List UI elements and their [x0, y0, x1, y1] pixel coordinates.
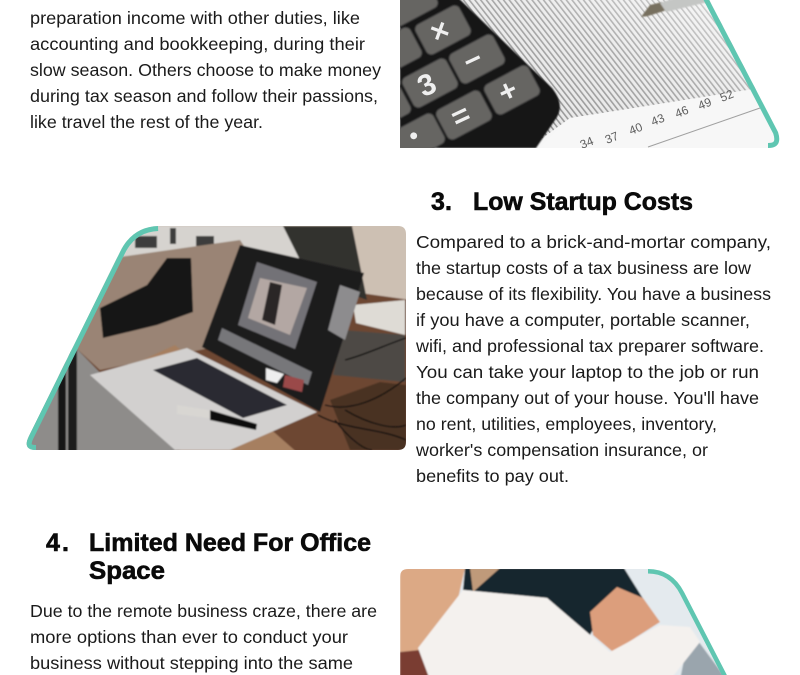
image: calculator on a printed chart [400, 0, 780, 148]
wires [318, 338, 406, 450]
text block: section 3 body: no rent, utilities, employees, inventory, [416, 414, 717, 434]
table [78, 293, 406, 450]
calculator key labels: + [493, 73, 523, 110]
image: laptop and camera on a desk [20, 220, 410, 455]
text block: section 3 body: You can take your laptop to the job or run [416, 362, 759, 382]
text block: section 3 body: if you have a computer, portable scanner, [416, 310, 750, 330]
text block: section 3 body [415, 232, 771, 486]
numbers on the chart ruler: 43 [649, 111, 667, 129]
calculator key labels [410, 22, 516, 140]
heading: 3. Low Startup Costs: 3. [431, 188, 452, 216]
text block: section 2 body (continued): accounting and bookkeeping, during their [30, 34, 365, 54]
text block: section 3 body: wifi, and professional tax preparer software. [415, 336, 764, 356]
floor and table legs [26, 348, 176, 450]
numbers on the chart ruler [580, 90, 734, 148]
text block: section 2 body (continued): during tax season and follow their passions, [30, 86, 378, 106]
heading: 4. Limited Need For Office Space: 4. [46, 529, 69, 557]
text block: section 4 body: Due to the remote business craze, there are [30, 601, 377, 621]
text block: section 3 body: benefits to pay out. [416, 466, 569, 486]
text block: section 3 body: Compared to a brick-and-mortar company, [416, 232, 771, 252]
numbers on the chart ruler: 34 [578, 134, 596, 152]
laptop screen [202, 245, 364, 412]
text block: section 3 body: because of its flexibility. You have a business [416, 284, 771, 304]
numbers on the chart ruler: 49 [696, 95, 714, 113]
text block: section 4 body: business without stepping into the same [30, 653, 353, 673]
text block: section 3 body: the company out of your house. You'll have [416, 388, 759, 408]
objects at right [353, 300, 405, 335]
pen [641, 0, 712, 17]
numbers on the chart ruler: 46 [673, 103, 691, 121]
numbers on the chart ruler: 37 [603, 129, 621, 147]
text block: section 2 body (continued) [30, 8, 381, 132]
text block: section 4 body [30, 601, 377, 673]
calculator key labels: = [446, 98, 476, 135]
text block: section 3 body: worker's compensation insurance, or [415, 440, 708, 460]
calculator key labels: • [404, 122, 423, 150]
text block: section 4 body: more options than ever to conduct your [30, 627, 348, 647]
text block: section 2 body (continued): like travel the rest of the year. [30, 112, 263, 132]
calculator key labels: × [425, 13, 455, 50]
numbers on the chart ruler: 52 [718, 87, 736, 105]
heading: 4. Limited Need For Office Space: Space [89, 557, 165, 585]
dark monitor behind [283, 226, 367, 300]
calculator body [400, 0, 561, 148]
heading: 4. Limited Need For Office Space [46, 529, 371, 585]
calculator key labels: 3 [412, 67, 442, 104]
text block: section 2 body (continued): preparation income with other duties, like [30, 8, 360, 28]
heading: 4. Limited Need For Office Space: Limited Need For Office [89, 529, 371, 557]
calculator key labels: − [458, 42, 488, 79]
text block: section 3 body: the startup costs of a tax business are low [416, 258, 751, 278]
background clutter [135, 228, 214, 248]
image: hands holding a sheet of paper [400, 565, 740, 675]
laptop base [90, 348, 317, 450]
marker pen [213, 412, 214, 413]
numbers on the chart ruler: 40 [627, 120, 645, 138]
text block: section 2 body (continued): slow season. Others choose to make money [30, 60, 381, 80]
heading: 3. Low Startup Costs: Low Startup Costs [473, 188, 693, 216]
camera [100, 258, 193, 338]
